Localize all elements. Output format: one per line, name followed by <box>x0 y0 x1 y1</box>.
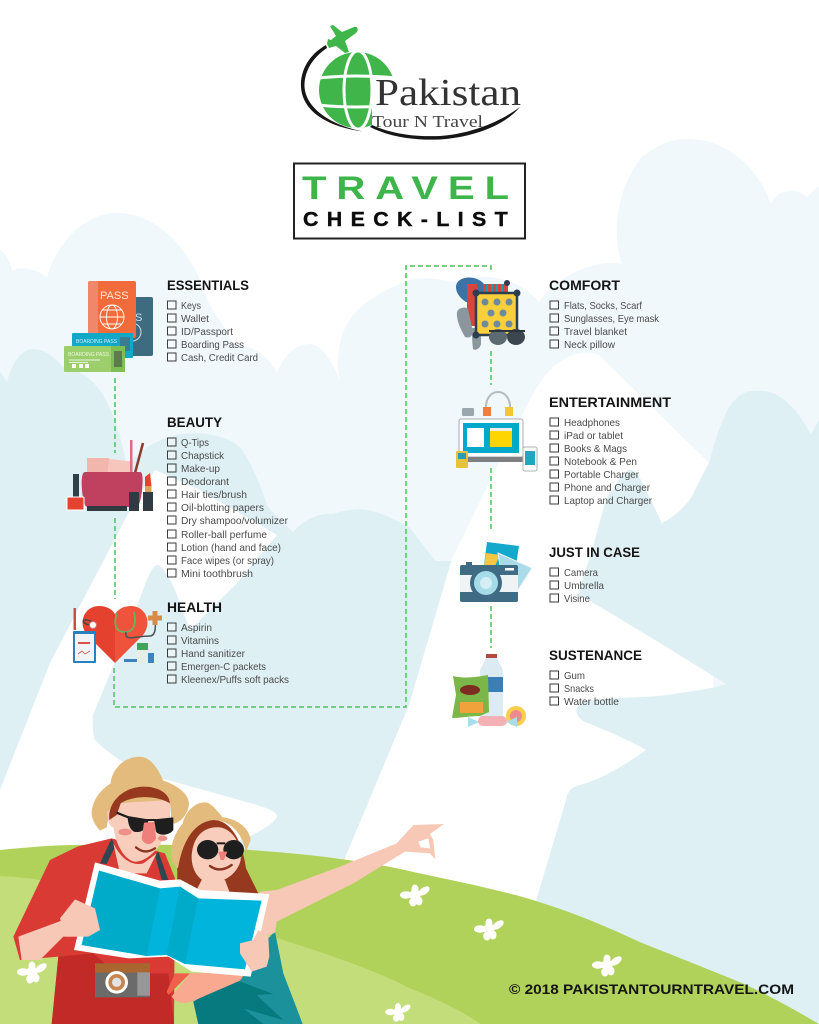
list: sustenance <box>550 670 619 708</box>
icon: passports and boarding passes: S <box>135 312 142 324</box>
list: beauty: Mini toothbrush <box>181 568 253 580</box>
list: beauty: Face wipes (or spray) <box>181 555 274 567</box>
list: beauty: Hair ties/brush <box>181 489 247 501</box>
list: essentials: Wallet <box>181 313 209 325</box>
icon: globe <box>319 52 393 128</box>
list: health: Emergen-C packets <box>181 661 266 673</box>
list: beauty: Q-Tips <box>181 437 209 449</box>
icon: passports and boarding passes <box>64 281 153 372</box>
list: health <box>168 622 289 686</box>
list: entertainment: Portable Charger <box>564 469 639 481</box>
icon: airplane <box>327 25 358 53</box>
icon: health heart and stethoscope <box>73 606 162 663</box>
heading: health: HEALTH <box>167 599 222 615</box>
logo swoosh <box>301 45 520 140</box>
heading: essentials: ESSENTIALS <box>167 277 249 293</box>
icon: comfort items <box>456 278 525 350</box>
list: beauty <box>168 437 288 580</box>
list: essentials: Keys <box>181 300 201 312</box>
icon: passports and boarding passes: PASS <box>100 290 129 302</box>
flowers <box>17 884 623 1022</box>
list: beauty: Roller-ball perfume <box>181 529 267 541</box>
icon: camera and photos <box>460 542 532 602</box>
list: beauty: Oil-blotting papers <box>181 502 264 514</box>
list: health: Aspirin <box>181 622 212 634</box>
list: beauty: Make-up <box>181 463 220 475</box>
title box: CHECK-LIST <box>303 208 516 231</box>
list: comfort <box>550 300 660 351</box>
icon: electronics <box>456 392 537 471</box>
list: essentials: ID/Passport <box>181 326 233 338</box>
hills <box>0 844 819 1024</box>
list: comfort: Sunglasses, Eye mask <box>564 313 660 325</box>
illustration: travelling couple with map <box>13 757 444 1024</box>
list: entertainment: Laptop and Charger <box>564 495 652 507</box>
list: sustenance: Water bottle <box>564 696 619 708</box>
heading: comfort: COMFORT <box>549 277 620 293</box>
list: just in case: Umbrella <box>564 580 604 592</box>
logo tagline: Tour N Travel <box>372 112 483 131</box>
list: beauty: Lotion (hand and face) <box>181 542 281 554</box>
list: comfort: Flats, Socks, Scarf <box>564 300 642 312</box>
footer credit: © 2018 PAKISTANTOURNTRAVEL.COM <box>509 981 794 997</box>
list: sustenance: Gum <box>564 670 585 682</box>
heading: just in case: JUST IN CASE <box>549 544 640 560</box>
list: entertainment: iPad or tablet <box>564 430 623 442</box>
logo <box>301 25 521 140</box>
list: entertainment <box>550 417 652 507</box>
icon: hanging camera <box>95 963 150 997</box>
list: health: Kleenex/Puffs soft packs <box>181 674 289 686</box>
list: essentials <box>168 300 258 364</box>
heading: beauty: BEAUTY <box>167 414 223 430</box>
list: beauty: Deodorant <box>181 476 229 488</box>
list: just in case: Camera <box>564 567 598 579</box>
icon: beauty bag <box>67 440 153 511</box>
map <box>74 862 269 977</box>
icon: passports and boarding passes: BOARDING PASS <box>76 339 118 345</box>
icon: snacks and water bottle <box>452 654 526 727</box>
list: entertainment: Phone and Charger <box>564 482 650 494</box>
list: comfort: Travel blanket <box>564 326 627 338</box>
title box: TRAVEL <box>302 170 519 206</box>
hands <box>60 899 269 972</box>
list: just in case <box>550 567 604 605</box>
list: entertainment: Headphones <box>564 417 620 429</box>
list: comfort: Neck pillow <box>564 339 615 351</box>
logo name: Pakistan <box>375 72 521 114</box>
dashed connector line <box>114 266 491 707</box>
list: health: Hand sanitizer <box>181 648 245 660</box>
list: essentials: Boarding Pass <box>181 339 244 351</box>
list: just in case: Visine <box>564 593 590 605</box>
icon: passports and boarding passes: BOARDING PASS <box>68 352 110 358</box>
heading: entertainment: ENTERTAINMENT <box>549 394 671 410</box>
list: beauty: Dry shampoo/volumizer <box>181 515 288 527</box>
title box <box>294 164 525 238</box>
man <box>13 757 247 1024</box>
list: sustenance: Snacks <box>564 683 594 695</box>
woman <box>171 802 444 1024</box>
list: beauty: Chapstick <box>181 450 225 462</box>
list: entertainment: Notebook & Pen <box>564 456 637 468</box>
heading: sustenance: SUSTENANCE <box>549 647 642 663</box>
list: entertainment: Books & Mags <box>564 443 627 455</box>
list: essentials: Cash, Credit Card <box>181 352 258 364</box>
list: health: Vitamins <box>181 635 219 647</box>
